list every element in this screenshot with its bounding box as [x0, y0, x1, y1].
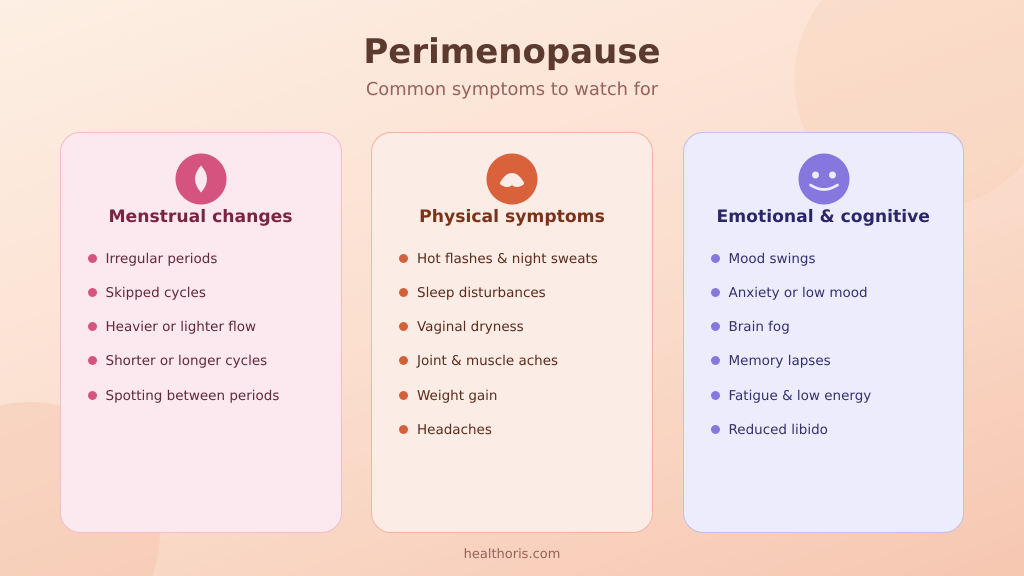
symptom list: [399, 251, 598, 438]
title: Perimenopause: [363, 32, 661, 72]
symptom list: Weight gain: [417, 388, 497, 404]
symptom list: Spotting between periods: [106, 388, 279, 404]
footer source: healthoris.com: [464, 547, 560, 562]
symptom list: Sleep disturbances: [417, 285, 546, 301]
symptom list: [711, 251, 871, 438]
symptom list: Anxiety or low mood: [728, 285, 868, 301]
symptom list: Reduced libido: [728, 422, 828, 438]
symptom list: Vaginal dryness: [417, 319, 524, 335]
symptom list: Hot flashes & night sweats: [417, 251, 598, 267]
heading: emotional and cognitive: Emotional & cognitive: [717, 207, 930, 227]
heading: physical symptoms: Physical symptoms: [419, 207, 605, 227]
symptom list: Brain fog: [728, 319, 790, 335]
symptom list: Heavier or lighter flow: [106, 319, 256, 335]
panel: emotional and cognitive: [682, 132, 964, 533]
panel: menstrual changes: [60, 132, 342, 533]
symptom list: Headaches: [417, 422, 492, 438]
symptom list: Joint & muscle aches: [417, 353, 558, 369]
heading: menstrual changes: Menstrual changes: [108, 207, 293, 227]
symptom list: Memory lapses: [728, 353, 831, 369]
icon: petal: [176, 154, 226, 204]
symptom list: Skipped cycles: [106, 285, 206, 301]
icon: smiley face: [798, 154, 850, 204]
symptom list: [88, 251, 279, 404]
symptom list: Irregular periods: [106, 251, 217, 267]
panel: physical symptoms: [371, 132, 653, 533]
icon: butterfly shape: [486, 154, 538, 204]
symptom list: Fatigue & low energy: [728, 388, 871, 404]
symptom list: Mood swings: [728, 251, 816, 267]
subtitle: Common symptoms to watch for: [366, 79, 658, 100]
symptom list: Shorter or longer cycles: [106, 353, 267, 369]
